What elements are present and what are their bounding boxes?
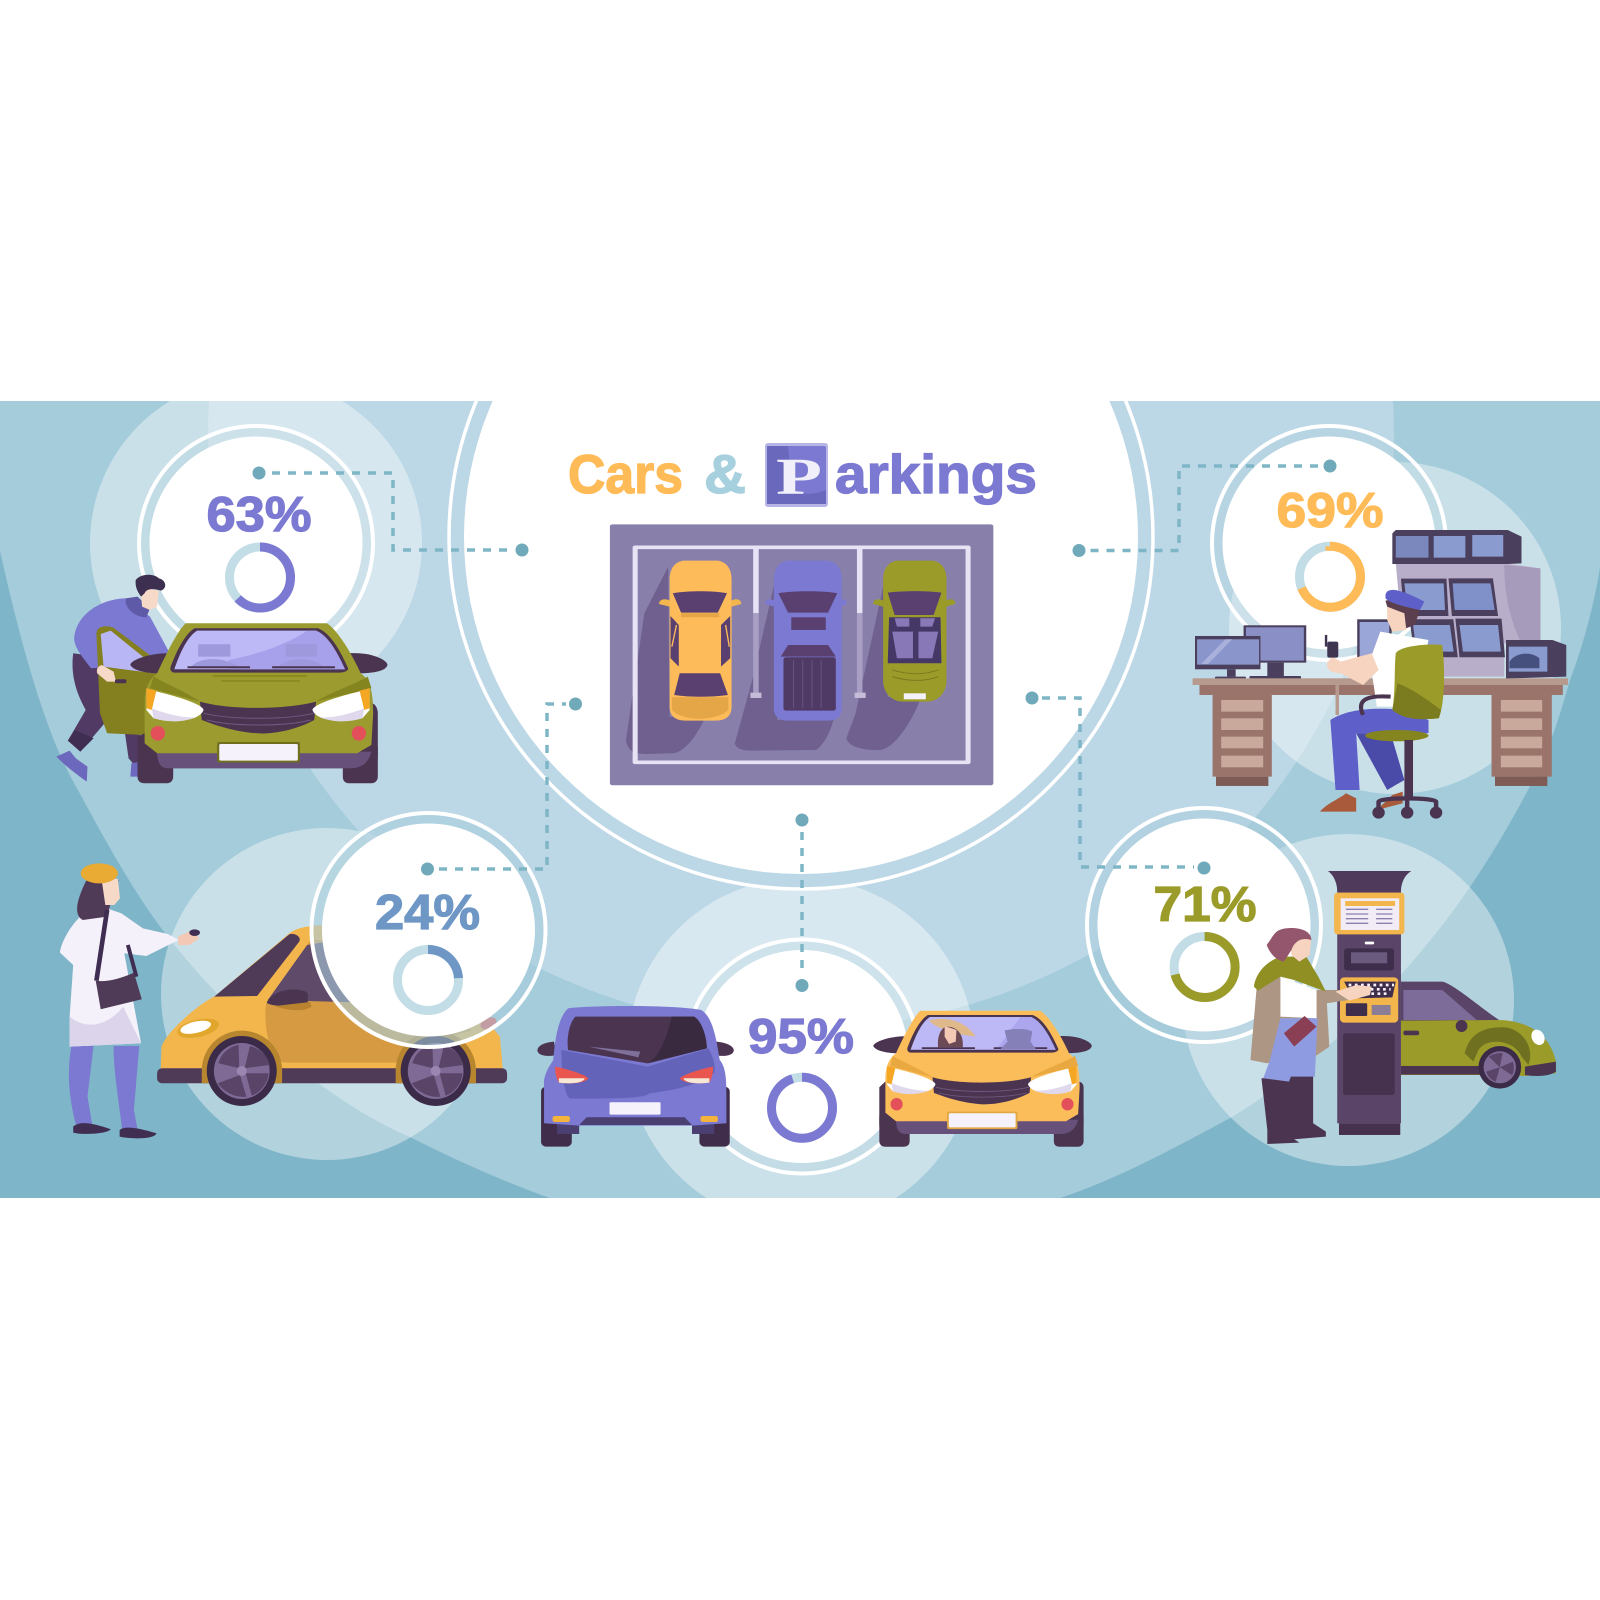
donut chart 71% <box>1174 936 1235 998</box>
stat: 69%: 69% <box>1276 484 1384 538</box>
stat: 24%: 24% <box>375 886 480 940</box>
desk <box>1193 678 1568 786</box>
stat: 69% <box>1276 484 1384 607</box>
panel: parking lot top view <box>610 524 993 785</box>
control cabinet <box>1392 530 1566 679</box>
car shadows <box>626 567 920 754</box>
woman with car key <box>60 863 200 1138</box>
panel: 63% circle <box>139 426 373 660</box>
man's sweater and head <box>74 575 171 668</box>
stat: 63% <box>206 488 312 608</box>
stat: 71% <box>1154 878 1256 998</box>
stat: 24% <box>375 886 480 1010</box>
icon: parking sign <box>765 443 828 507</box>
connector: 24% to centre <box>421 698 582 876</box>
stat: 95%: 95% <box>748 1010 854 1064</box>
man opening olive car door <box>56 575 387 783</box>
donut chart 63% <box>230 547 290 608</box>
stat: 95% <box>748 1010 854 1138</box>
man's trousers and shoes <box>56 653 141 782</box>
connector: 69% to centre <box>1072 460 1336 557</box>
security control room <box>1193 530 1568 819</box>
panel: 95% circle <box>685 940 919 1174</box>
connector: 63% to centre <box>252 466 528 556</box>
title: Cars <box>568 443 683 505</box>
parking payment kiosk with green car <box>1250 871 1556 1144</box>
driver-facing yellow car <box>873 1011 1092 1147</box>
security guard on chair <box>1320 590 1444 819</box>
icon: parking sign: P <box>776 449 822 506</box>
kiosk <box>1328 871 1411 1135</box>
driver in yellow car <box>929 1019 1036 1049</box>
panel: 24% circle <box>312 813 546 1047</box>
purple pickup top view <box>765 561 846 721</box>
connector: 71% to centre <box>1026 692 1210 874</box>
stat: 63%: 63% <box>206 488 312 542</box>
car door <box>96 626 157 735</box>
title <box>568 443 1037 507</box>
donut chart 95% <box>772 1077 832 1138</box>
side view yellow car <box>157 925 507 1106</box>
yellow car top view <box>659 561 741 721</box>
background band with layered circles <box>0 401 1600 1198</box>
olive car front <box>130 623 387 783</box>
title: arkings <box>835 443 1037 505</box>
connector: 95% to centre <box>796 814 808 992</box>
donut chart 24% <box>398 950 458 1010</box>
title: & <box>704 443 746 505</box>
woman with scarf at kiosk <box>1250 928 1372 1144</box>
desk monitors <box>1195 619 1392 679</box>
panel: 71% circle <box>1087 808 1321 1042</box>
blue rear view car <box>537 1006 734 1147</box>
green car <box>1401 982 1556 1089</box>
stat: 71%: 71% <box>1154 878 1256 932</box>
panel: 69% circle <box>1212 426 1446 660</box>
olive convertible top view <box>873 561 955 702</box>
donut chart 69% <box>1300 546 1360 607</box>
parking bay lines <box>635 547 968 762</box>
